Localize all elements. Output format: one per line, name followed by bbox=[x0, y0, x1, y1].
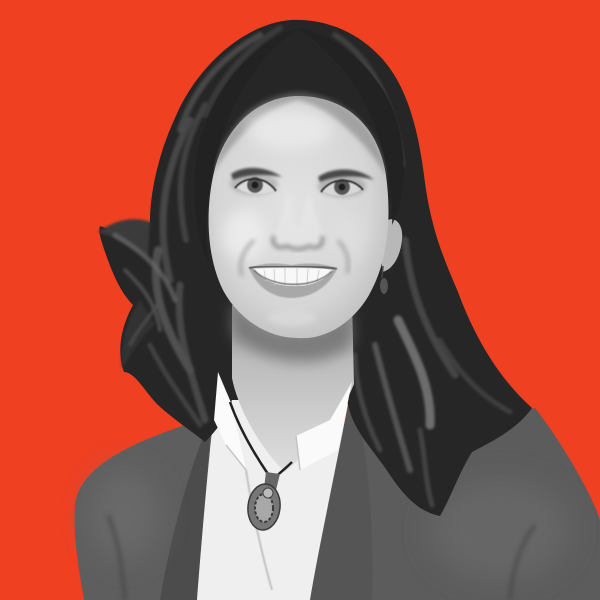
right cheek highlight bbox=[327, 211, 363, 259]
shirt collar bbox=[214, 372, 352, 590]
shirt base bbox=[197, 372, 352, 600]
mouth bbox=[249, 263, 337, 298]
eye sockets bbox=[230, 173, 278, 195]
chin shadow bbox=[268, 310, 316, 326]
hair front strands bbox=[194, 28, 404, 262]
smile lines bbox=[240, 240, 254, 276]
left eye bbox=[235, 177, 276, 194]
hair flick strands bbox=[98, 219, 150, 258]
forehead highlight bbox=[248, 110, 332, 150]
necklace cord bbox=[230, 402, 292, 482]
earring bbox=[380, 266, 388, 294]
pendant bbox=[246, 472, 282, 532]
cardigan bbox=[75, 385, 600, 600]
face bbox=[209, 92, 389, 338]
forehead hair shadow bbox=[212, 92, 388, 178]
eyebrows bbox=[231, 168, 282, 180]
ear bbox=[382, 219, 402, 272]
nose bbox=[272, 185, 326, 252]
neck shadow bbox=[232, 300, 352, 362]
hair highlights right bbox=[335, 35, 510, 505]
left cheek highlight bbox=[223, 209, 267, 261]
right eye bbox=[321, 179, 363, 196]
hair highlights left bbox=[115, 28, 280, 425]
neck bbox=[232, 300, 354, 472]
hair back layer bbox=[98, 20, 532, 516]
